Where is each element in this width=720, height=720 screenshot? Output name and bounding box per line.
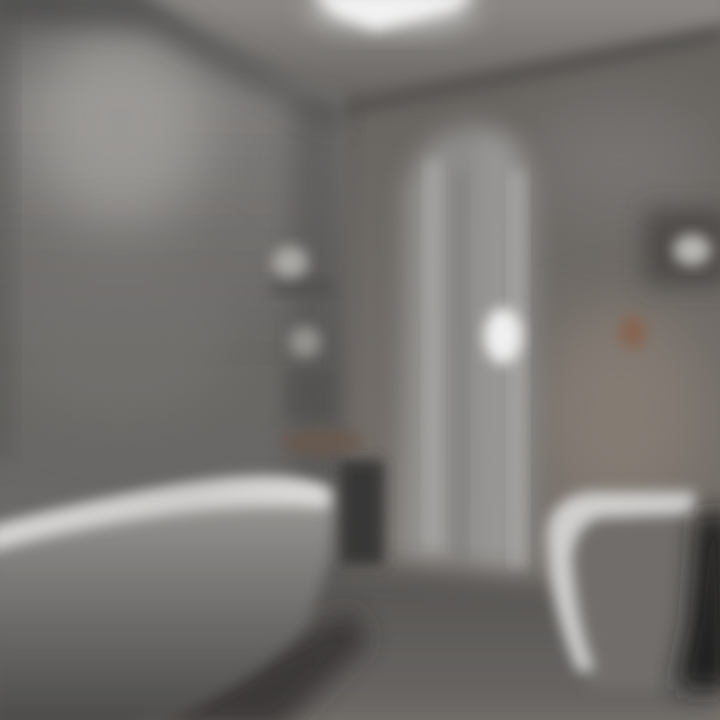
ceiling [0,0,720,130]
bathtub [0,478,333,720]
right wall warm patch [530,100,710,515]
ceiling light [307,0,480,32]
right dark shadow [675,510,720,690]
wall niche fixtures [272,246,335,420]
right fixture [547,492,700,690]
floor [0,565,720,720]
curtain highlight [484,308,522,364]
right wall shelf [620,210,720,349]
floor shadow [130,610,370,720]
left wall [0,0,345,590]
shower curtain [395,125,538,575]
side stand [280,429,384,565]
